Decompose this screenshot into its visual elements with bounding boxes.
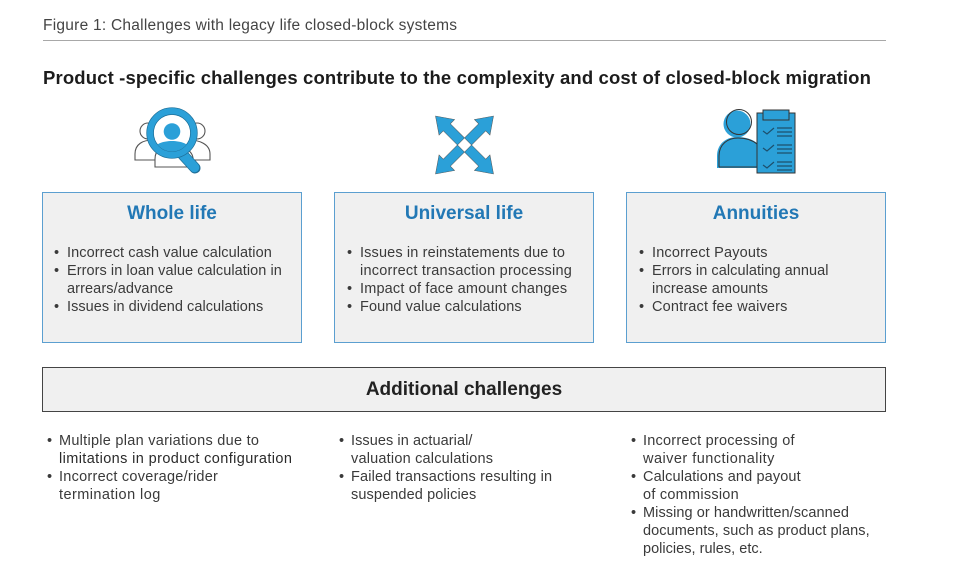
text: annuities challenges: Errors in calculating annual [652,263,829,279]
banner: additional challenges: Additional challenges [366,379,562,400]
text: additional challenges column 2 [339,433,552,503]
text: additional challenges column 1: • [47,469,52,485]
text: additional challenges column 1: termination log [59,487,161,503]
text: additional challenges column 3: waiver functionality [643,451,775,467]
text: additional challenges column 2: suspended policies [351,487,476,503]
text: whole life challenges: Issues in dividend calculations [67,299,263,315]
text: additional challenges column 2: • [339,469,344,485]
text: annuities challenges: Incorrect Payouts [652,245,768,261]
text: additional challenges column 3: Calculations and payout [643,469,801,485]
text: universal life challenges: Issues in reinstatements due to [360,245,565,261]
main heading: Product -specific challenges contribute to the complexity and cost of closed-block migration [43,67,871,88]
text: universal life challenges [347,245,572,315]
text: additional challenges column 3: • [631,505,636,521]
text: whole life challenges: Errors in loan value calculation in [67,263,282,279]
text: additional challenges column 3: documents, such as product plans, [643,523,870,539]
text: additional challenges column 3: policies, rules, etc. [643,541,763,557]
heading: universal life: Universal life [405,203,523,224]
text: additional challenges column 3 [631,433,870,557]
text: whole life challenges: arrears/advance [67,281,173,297]
text: additional challenges column 2: Failed transactions resulting in [351,469,552,485]
text: additional challenges column 1: Incorrect coverage/rider [59,469,218,485]
text: whole life challenges [54,245,282,315]
text: additional challenges column 3: Incorrect processing of [643,433,795,449]
text: whole life challenges: Incorrect cash value calculation [67,245,272,261]
icon: magnifier over people [134,107,211,174]
text: whole life challenges: • [54,263,59,279]
text: additional challenges column 1: • [47,433,52,449]
text: additional challenges column 1: Multiple plan variations due to [59,433,259,449]
text: additional challenges column 3: Missing or handwritten/scanned [643,505,849,521]
text: universal life challenges: • [347,281,352,297]
heading: annuities: Annuities [713,203,799,224]
panel: universal life [334,192,594,343]
text: additional challenges column 2: Issues in actuarial/ [351,433,472,449]
text: additional challenges column 1: limitations in product configuration [59,451,292,467]
text: universal life challenges: • [347,299,352,315]
text: annuities challenges: Contract fee waivers [652,299,788,315]
text: additional challenges column 2: • [339,433,344,449]
icon: four diverging arrows [435,116,494,174]
heading: whole life: Whole life [127,203,217,224]
text: annuities challenges: • [639,263,644,279]
text: whole life challenges: • [54,299,59,315]
text: whole life challenges: • [54,245,59,261]
text: annuities challenges: • [639,299,644,315]
text: annuities challenges: increase amounts [652,281,768,297]
banner: additional challenges [42,367,886,412]
text: universal life challenges: Impact of face amount changes [360,281,567,297]
text: additional challenges column 2: valuation calculations [351,451,493,467]
text: universal life challenges: • [347,245,352,261]
figure caption: Figure 1: Challenges with legacy life closed-block systems [43,17,457,34]
text: annuities challenges: • [639,245,644,261]
panel: annuities [626,192,886,343]
panel: whole life [42,192,302,343]
icon: person with checklist [717,109,796,174]
text: universal life challenges: incorrect transaction processing [360,263,572,279]
text: additional challenges column 3: • [631,433,636,449]
text: additional challenges column 3: • [631,469,636,485]
text: additional challenges column 1 [47,433,292,503]
text: universal life challenges: Found value calculations [360,299,522,315]
text: annuities challenges [639,245,829,315]
text: additional challenges column 3: of commission [643,487,739,503]
